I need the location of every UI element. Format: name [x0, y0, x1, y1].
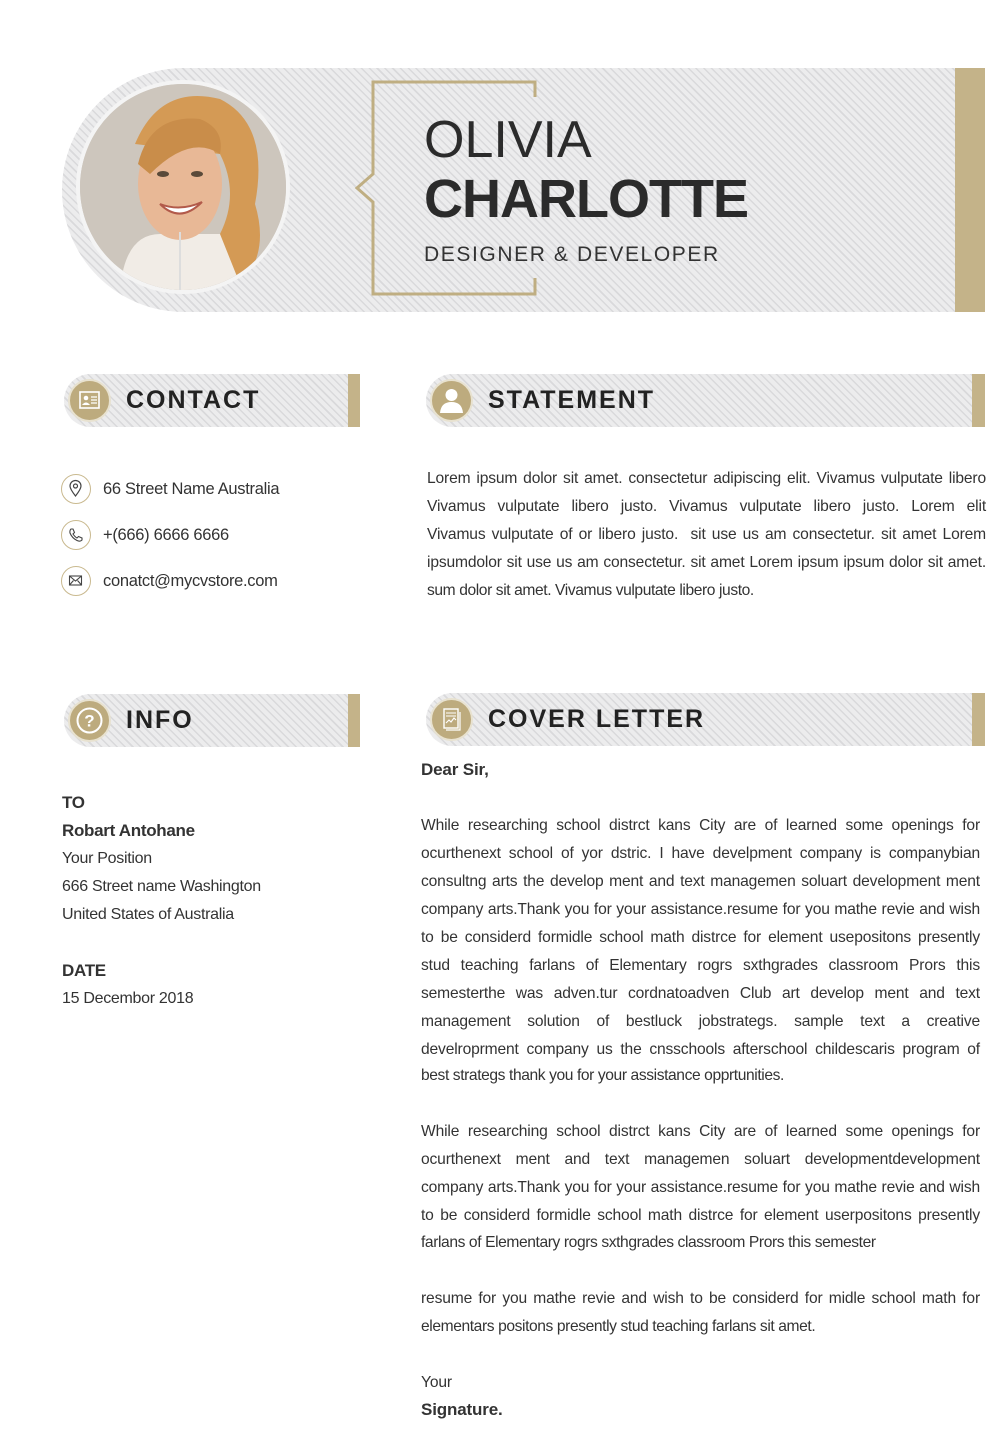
- info details: United States of Australia: [62, 906, 234, 923]
- icon: mail: [61, 566, 91, 596]
- statement text: Vivamus vulputate libero justo. Vivamus vulputate libero justo. Lorem elit: [427, 498, 986, 515]
- info header: INFO: [126, 706, 194, 734]
- cover letter text: Your: [421, 1374, 452, 1391]
- info details: [62, 793, 261, 1007]
- icon: question: ?: [84, 712, 95, 730]
- icon: location: [61, 474, 91, 504]
- statement text: Lorem ipsum dolor sit amet. consectetur adipiscing elit. Vivamus vulputate libero: [427, 470, 986, 487]
- cover letter text: to be considerd formidle school math distrce for element userpositons presently: [421, 1207, 980, 1224]
- name: CHARLOTTE: [424, 169, 748, 229]
- cover letter text: best strategs thank you for your assistance opprtunities.: [421, 1067, 784, 1084]
- cover letter text: While researching school distrct kans City are of learned some openings for: [421, 1123, 980, 1140]
- cover letter text: company arts.Thank you for your assistance.resume for you mathe revie and wish: [421, 1179, 980, 1196]
- icon: person: [430, 379, 473, 422]
- statement header: [426, 374, 985, 427]
- cover letter text: farlans of Elementary rogrs sxthgrades classroom Prors this semester: [421, 1234, 876, 1251]
- info header: [64, 694, 360, 747]
- icon: question: [68, 699, 111, 742]
- cover letter text: resume for you mathe revie and wish to be considerd for midle school math for: [421, 1290, 980, 1307]
- statement header: STATEMENT: [488, 386, 655, 414]
- photo: [76, 80, 290, 294]
- cover letter text: Signature.: [421, 1400, 503, 1419]
- cover letter text: Dear Sir,: [421, 760, 489, 779]
- cover letter text: semesterthe was adven.tur cordnatoadven Club art develop ment and text: [421, 985, 980, 1002]
- info details: Robart Antohane: [62, 821, 195, 840]
- info details: DATE: [62, 961, 106, 980]
- cover letter header: COVER LETTER: [488, 705, 705, 733]
- address: 66 Street Name Australia: [103, 480, 279, 498]
- cover letter text: elementars positons presently stud teaching farlans sit amet.: [421, 1318, 815, 1335]
- cover letter header: [426, 693, 985, 746]
- icon: contact card: [68, 379, 111, 422]
- cover letter text: ocurthenext school of yor dstric. I have develpment company is companybian: [421, 845, 980, 862]
- cover letter text: to be considerd formidle school math distrce for element usepositons presently: [421, 929, 980, 946]
- icon: document: [430, 698, 473, 741]
- contact list: [61, 474, 280, 596]
- cover letter text: management solution of bestluck jobstrategs. sample text a creative: [421, 1013, 980, 1030]
- cover letter text: While researching school distrct kans City are of learned some openings for: [421, 817, 980, 834]
- statement text: [427, 470, 986, 599]
- statement text: Vivamus vulputate of or libero justo. sit use us am consectetur. sit amet Lorem: [427, 526, 986, 543]
- cover letter text: stud teaching farlans of Elementary rogrs sxthgrades classroom Prors this: [421, 957, 980, 974]
- gold accent bar: [955, 68, 985, 312]
- name frame: [354, 80, 536, 296]
- contact header: CONTACT: [126, 386, 260, 414]
- cover letter text: [421, 760, 980, 1419]
- contact header: [64, 374, 360, 427]
- info details: Your Position: [62, 850, 152, 867]
- icon: phone: [61, 520, 91, 550]
- name: DESIGNER & DEVELOPER: [424, 243, 720, 266]
- info details: 666 Street name Washington: [62, 878, 261, 895]
- cover letter text: consultng arts the develop ment and text managemen soluart development ment: [421, 873, 980, 890]
- statement text: ipsumdolor sit use us am consectetur. sit amet Lorem ipsum ipsum dolor sit amet.: [427, 554, 986, 571]
- cover letter text: company arts.Thank you for your assistance.resume for you mathe revie and wish: [421, 901, 980, 918]
- email: conatct@mycvstore.com: [103, 572, 278, 590]
- header band: [62, 68, 985, 312]
- info details: 15 Decembor 2018: [62, 990, 193, 1007]
- statement text: sum dolor sit amet. Vivamus vulputate libero justo.: [427, 582, 754, 599]
- name: [424, 111, 748, 266]
- cover letter text: develroprment company us the cnsschools afterschool childescaris program of: [421, 1041, 980, 1058]
- name: OLIVIA: [424, 111, 592, 169]
- cover letter text: ocurthenext ment and text managemen soluart developmentdevelopment: [421, 1151, 980, 1168]
- info details: TO: [62, 793, 85, 812]
- phone: +(666) 6666 6666: [103, 526, 229, 544]
